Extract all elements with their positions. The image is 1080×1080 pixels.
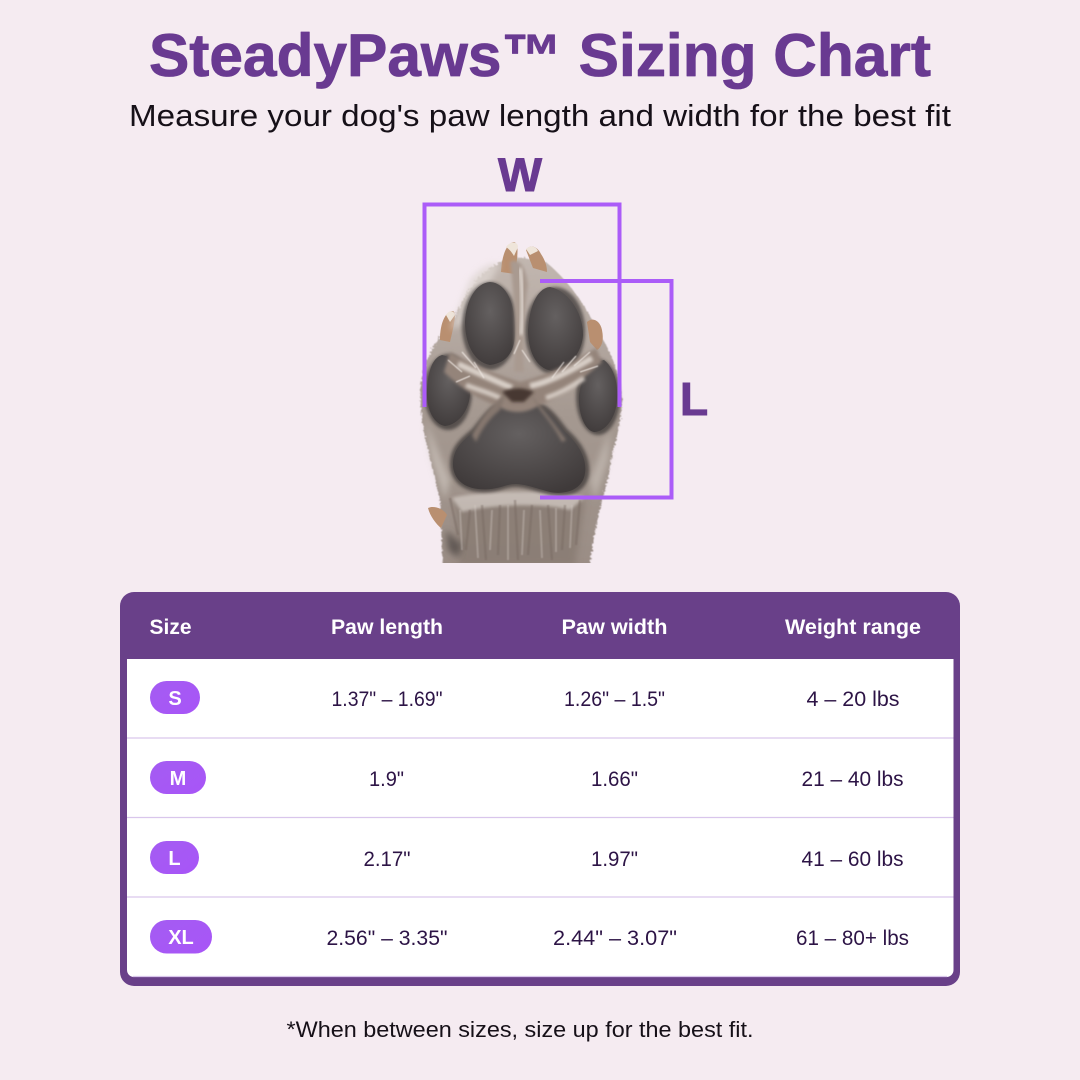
table body [127,659,954,977]
table frame [120,592,960,986]
central fur between pads [444,261,602,442]
title: SteadyPaws™ Sizing Chart [149,22,931,89]
row: M: 1.9" [369,768,404,791]
table header: Paw length [331,616,443,639]
paw diagram [420,148,708,566]
row: S: 1.37" – 1.69" [332,688,442,711]
size badge: L: L [168,848,181,870]
footnote: *When between sizes, size up for the best fit. [286,1017,754,1042]
row dividers [127,738,954,976]
row: M [150,761,904,794]
table header [150,616,921,639]
pad shadows [424,282,620,496]
row: XL: 2.44" – 3.07" [553,927,677,950]
row: XL [150,920,909,954]
claws [428,242,603,528]
size badge: L [150,841,199,874]
row: M: 1.66" [591,768,638,791]
size badge: S [150,681,200,714]
row: S: 1.26" – 1.5" [564,688,665,711]
toe pads [427,282,617,432]
W label: W [498,148,543,201]
L bracket [540,281,672,498]
table header: Size [150,616,192,639]
fur shading [425,264,610,566]
W bracket [424,204,620,407]
size badge: M [150,761,206,794]
subtitle: Measure your dog's paw length and width for the best fit [129,98,951,133]
size badge: XL: XL [168,927,194,949]
row: L: 1.97" [591,848,638,871]
row: XL: 2.56" – 3.35" [326,927,448,950]
fur silhouette [420,257,622,566]
size badge: XL [150,920,212,954]
panel: sizing table [120,592,960,986]
row: M: 21 – 40 lbs [802,768,904,791]
row: XL: 61 – 80+ lbs [796,927,909,950]
main pad [453,416,586,493]
row: L: 41 – 60 lbs [802,848,904,871]
row: L [150,841,904,874]
row: S: 4 – 20 lbs [806,688,900,711]
row: S [150,681,900,714]
icon: dog paw photo [420,242,622,566]
L label: L [680,373,708,425]
size badge: S: S [168,688,182,710]
size badge: M: M [170,768,186,790]
table header: Weight range [785,616,921,639]
table header: Paw width [562,616,668,639]
row: L: 2.17" [364,848,410,871]
